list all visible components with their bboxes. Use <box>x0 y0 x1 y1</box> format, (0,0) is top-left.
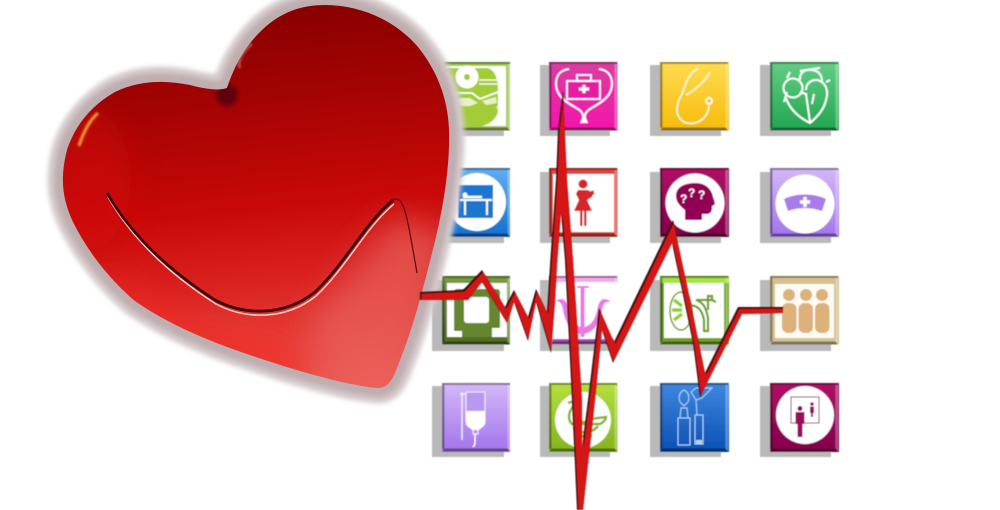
heart body <box>62 5 450 388</box>
tile: operating table <box>432 168 510 243</box>
tile: x-ray frame <box>432 276 510 351</box>
question marks: ? <box>698 188 705 202</box>
tile: nurse cap <box>760 168 839 243</box>
ECG dark edge <box>420 90 783 510</box>
tile: brain with question marks <box>650 168 729 243</box>
panel: icon grid <box>432 62 839 457</box>
tile: surgeon <box>432 62 510 136</box>
tile: mother and baby <box>540 168 618 243</box>
heart halo <box>63 5 449 388</box>
tile: stethoscope <box>650 62 729 136</box>
tile: IV drip <box>432 383 510 457</box>
question marks <box>680 186 705 206</box>
ECG red core <box>422 92 784 510</box>
tile: psi symbol <box>540 276 618 351</box>
medical infographic scene <box>45 0 840 510</box>
tile: kidney <box>650 276 729 351</box>
tile: person in exam room <box>760 383 839 457</box>
tile: otoscope <box>650 383 729 457</box>
smile groove <box>107 193 417 315</box>
tile: mortar and pestle <box>540 383 618 457</box>
ECG pulse line <box>420 90 784 510</box>
question marks: ? <box>688 186 695 200</box>
question marks: ? <box>680 192 687 206</box>
tile: anatomical heart <box>760 62 839 136</box>
heart <box>40 0 470 400</box>
tile: three people <box>760 276 839 351</box>
tile: medical bag stethoscope <box>540 62 618 136</box>
